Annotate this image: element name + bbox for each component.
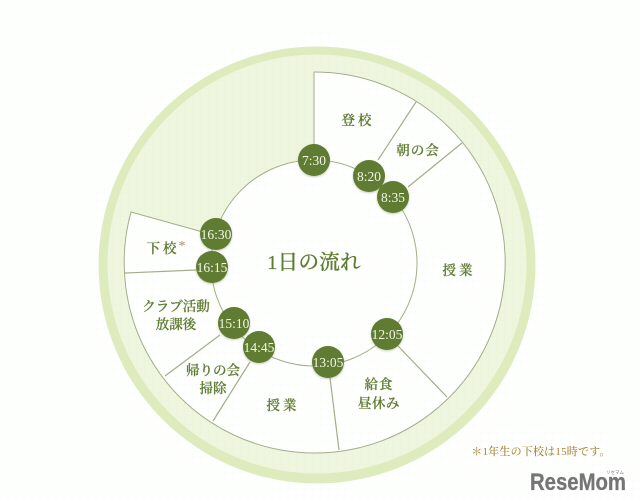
time badge 7:30 <box>298 144 330 176</box>
time badge 16:15 <box>196 251 228 283</box>
time badge 13:05: 13:05 <box>313 355 344 370</box>
time badge 12:05: 12:05 <box>372 327 403 342</box>
time badge 12:05 <box>371 318 403 350</box>
label: 下校: * <box>178 239 186 254</box>
time badge 16:15: 16:15 <box>197 260 228 275</box>
time badge 14:45: 14:45 <box>244 340 275 355</box>
time badge 8:35: 8:35 <box>381 190 405 205</box>
time badge 8:20: 8:20 <box>357 169 381 184</box>
label: 給食 昼休み <box>358 377 400 411</box>
timeline sectors <box>124 72 505 453</box>
outer ring <box>98 46 536 484</box>
time badge 16:30 <box>200 218 232 250</box>
time badge 8:20 <box>353 160 385 192</box>
label: 授業 afternoon: 授業 <box>266 397 300 413</box>
time badge 16:30: 16:30 <box>201 227 232 242</box>
time badge 13:05 <box>312 346 344 378</box>
label: 帰りの会 掃除: 帰りの会 <box>186 362 240 378</box>
footnote: ＊1年生の下校は15時です。 <box>471 444 611 458</box>
title: 1日の流れ <box>267 251 361 274</box>
time badge 8:35 <box>377 181 409 213</box>
label: クラブ活動 放課後: クラブ活動 <box>142 299 210 314</box>
time badge 15:10: 15:10 <box>219 316 250 331</box>
label: 給食 昼休み: 給食 <box>364 377 394 392</box>
logo: ReseMom: リセマム <box>606 470 624 476</box>
label: 登校: 登校 <box>342 112 374 128</box>
time badge 15:10 <box>218 307 250 339</box>
time badge 7:30: 7:30 <box>302 153 326 168</box>
label: 帰りの会 掃除 <box>186 362 240 396</box>
label: 下校: 下校 <box>146 240 180 256</box>
label: 授業 morning: 授業 <box>442 262 476 278</box>
label: クラブ活動 放課後 <box>142 299 210 332</box>
label: クラブ活動 放課後: 放課後 <box>156 316 197 332</box>
label: 給食 昼休み: 昼休み <box>358 396 400 411</box>
label: 朝の会: 朝の会 <box>396 142 440 158</box>
time badge 14:45 <box>243 331 275 363</box>
label: 帰りの会 掃除: 掃除 <box>200 380 227 396</box>
